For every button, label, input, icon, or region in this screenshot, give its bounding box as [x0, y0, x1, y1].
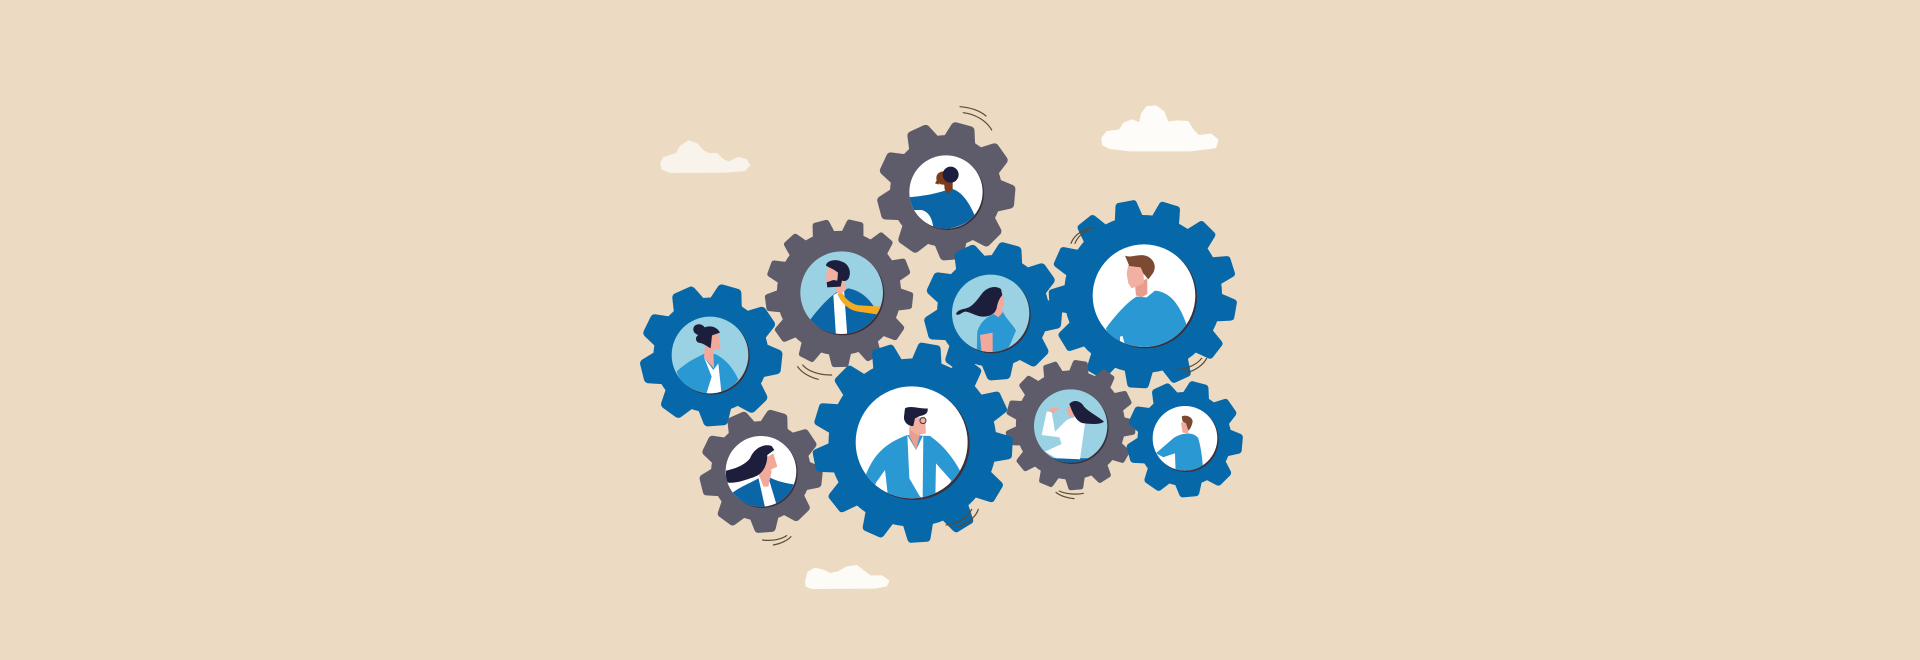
gear: blue, middle woman — [907, 226, 1079, 397]
gear: big center blue — [795, 326, 1029, 559]
motion lines: right gray gear — [1056, 491, 1083, 499]
gear: top gray — [860, 106, 1032, 277]
gear: gray, right woman — [995, 351, 1146, 500]
figure: man with glasses, big center gear — [856, 386, 970, 503]
figure: man in top gray gear — [907, 155, 984, 230]
cloud: upper left — [661, 141, 749, 172]
motion lines: big right gear, bottom — [1175, 358, 1207, 373]
cloud: upper right — [1103, 107, 1217, 150]
figure: woman with flowing hair, middle gear — [952, 275, 1031, 355]
gear: big right blue — [1024, 176, 1261, 412]
figure: woman in white, right gray gear — [1034, 389, 1109, 467]
gear: gray, lower-left woman — [683, 395, 839, 549]
gear: gray, bearded man — [749, 204, 929, 382]
gear: small right blue — [1112, 368, 1257, 511]
illustration: people in interlocking gears — [640, 105, 1243, 589]
motion lines: top gray gear — [960, 107, 992, 130]
motion lines: bearded man gear — [798, 365, 832, 379]
motion lines: big center gear — [946, 509, 978, 527]
gear: blue, left woman — [621, 267, 801, 445]
motion lines: big right gear, top — [1071, 227, 1095, 243]
figure: woman in lower-left gray gear — [726, 436, 798, 510]
figure: man in small right gear — [1153, 406, 1219, 473]
motion lines: lower-left gear — [763, 536, 791, 545]
figure: bearded man with orange tie — [800, 251, 884, 338]
cloud: bottom — [806, 566, 888, 588]
figure: woman with bun, left gear — [672, 317, 750, 397]
figure: man in big right gear — [1093, 244, 1197, 353]
